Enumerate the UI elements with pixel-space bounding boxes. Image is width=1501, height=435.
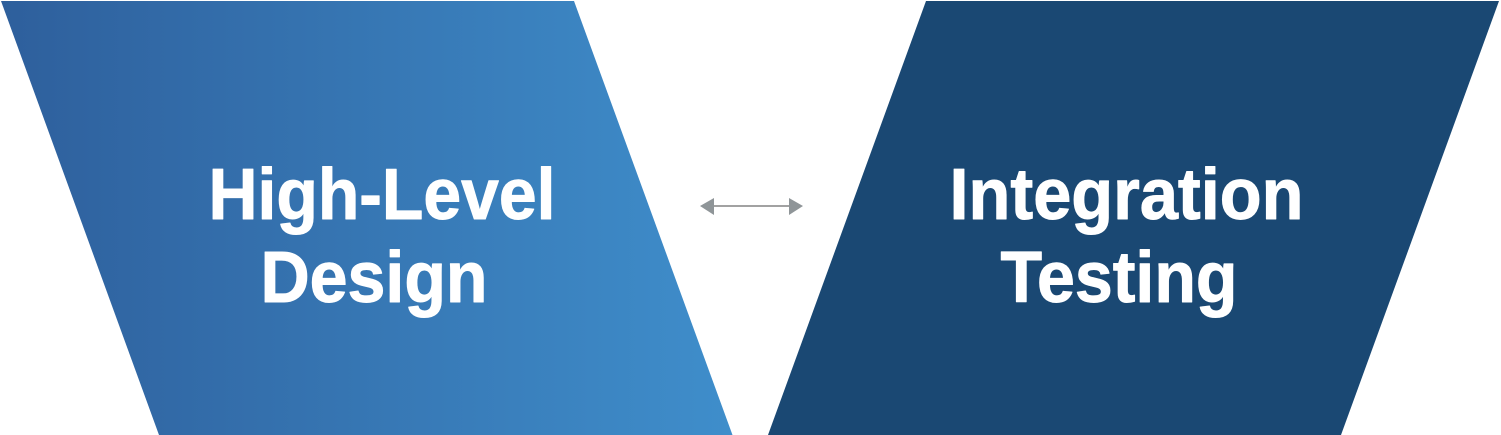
heading: Integration Testing: Testing [1000, 238, 1238, 318]
panel shape: right parallelogram [768, 1, 1499, 435]
panel: high-level design [1, 1, 732, 435]
heading: Integration Testing [950, 155, 1304, 318]
heading: High-Level Design [208, 155, 556, 318]
heading: High-Level Design: Design [260, 238, 488, 318]
arrow: bidirectional link [700, 198, 803, 215]
panel: integration testing [768, 1, 1499, 435]
heading: High-Level Design: High-Level [208, 155, 556, 235]
heading: Integration Testing: Integration [950, 155, 1304, 235]
panel shape: left parallelogram [1, 1, 732, 435]
